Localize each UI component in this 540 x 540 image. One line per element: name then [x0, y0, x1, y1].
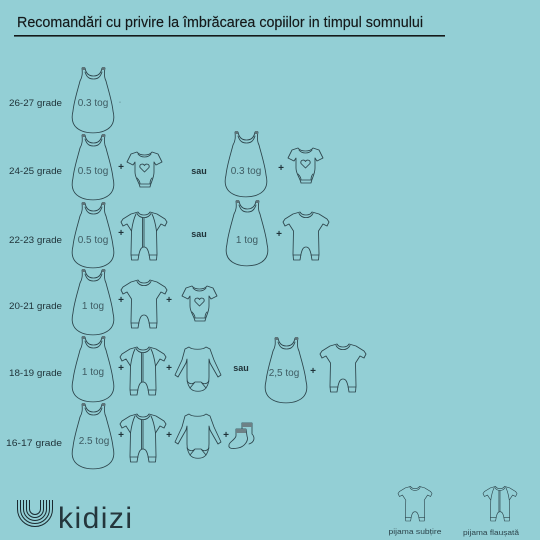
- row: 22-23 grade: sau: [191, 229, 207, 239]
- row: 26-27 grade: 26-27 grade: [9, 98, 62, 109]
- logo: kidizi: kidizi: [58, 502, 132, 535]
- row: 22-23 grade: +: [118, 228, 124, 239]
- row: 16-17 grade: [6, 403, 254, 469]
- row: 24-25 grade: +: [118, 162, 124, 173]
- sleeping bag 1 tog: [226, 200, 268, 266]
- sleeping bag 0.5 tog: [72, 202, 114, 268]
- row: 16-17 grade: 16-17 grade: [6, 438, 62, 449]
- row: 20-21 grade: +: [118, 295, 124, 306]
- sleeping bag 1 tog: [72, 269, 114, 335]
- sleeping bag 2.5 tog: 2.5 tog: [79, 436, 109, 447]
- fleece pyjama: [120, 414, 166, 462]
- legend: thin pyjama: [388, 486, 442, 536]
- sleeping bag 0.5 tog: [72, 134, 114, 200]
- row: 18-19 grade: 18-19 grade: [9, 368, 62, 379]
- short bodysuit: [182, 286, 217, 321]
- row: 24-25 grade: +: [278, 163, 284, 174]
- sleeping bag 0.5 tog: 0.5 tog: [78, 235, 108, 246]
- sleeping bag 1 tog: 1 tog: [82, 301, 104, 312]
- sleeping bag 1 tog: 1 tog: [236, 235, 258, 246]
- sleeping bag 0.3 tog: 0.3 tog: [78, 98, 108, 109]
- socks: [229, 423, 254, 449]
- row: 16-17 grade: +: [166, 430, 172, 441]
- row: 16-17 grade: +: [118, 430, 124, 441]
- sleeping bag 0.3 tog: [225, 131, 267, 197]
- row: 18-19 grade: [9, 336, 366, 403]
- row: 20-21 grade: +: [166, 295, 172, 306]
- legend: fleece pyjama: [463, 486, 520, 537]
- row: 20-21 grade: [9, 269, 217, 335]
- fleece pyjama: [120, 347, 166, 395]
- row: 22-23 grade: +: [276, 229, 282, 240]
- sleeping bag 1 tog: 1 tog: [82, 367, 104, 378]
- legend: fleece pyjama: pijama flaușată: [463, 528, 520, 537]
- row: 20-21 grade: 20-21 grade: [9, 301, 62, 312]
- short bodysuit: [127, 152, 162, 187]
- row: 18-19 grade: +: [118, 363, 124, 374]
- long bodysuit: [175, 347, 221, 391]
- row: 26-27 grade: [9, 67, 121, 133]
- thin pyjama: [320, 344, 366, 392]
- row: 24-25 grade: [9, 131, 323, 200]
- row: 26-27 grade: ·: [119, 97, 121, 106]
- row: 22-23 grade: [9, 200, 329, 268]
- thin pyjama: [283, 212, 329, 260]
- logo: kidizi: [18, 500, 132, 535]
- row: 24-25 grade: 24-25 grade: [9, 166, 62, 177]
- sleeping bag 0.3 tog: 0.3 tog: [231, 166, 261, 177]
- title: Recomandări cu privire la îmbrăcarea copiilor in timpul somnului: [17, 15, 423, 31]
- long bodysuit: [175, 414, 221, 458]
- sleeping bag 1 tog: [72, 336, 114, 402]
- sleeping bag 0.5 tog: 0.5 tog: [78, 166, 108, 177]
- row: 24-25 grade: sau: [191, 166, 207, 176]
- sleeping bag 2.5 tog: [72, 403, 114, 469]
- short bodysuit: [288, 148, 323, 183]
- row: 18-19 grade: +: [166, 363, 172, 374]
- thin pyjama: [121, 280, 167, 328]
- fleece pyjama: [121, 212, 167, 260]
- sleeping bag 2,5 tog: [265, 337, 307, 403]
- legend: thin pyjama: pijama subțire: [388, 527, 442, 536]
- row: 18-19 grade: +: [310, 366, 316, 377]
- row: 18-19 grade: sau: [233, 363, 249, 373]
- row: 16-17 grade: +: [223, 430, 229, 441]
- row: 22-23 grade: 22-23 grade: [9, 235, 62, 246]
- sleeping bag 2,5 tog: 2,5 tog: [269, 368, 299, 379]
